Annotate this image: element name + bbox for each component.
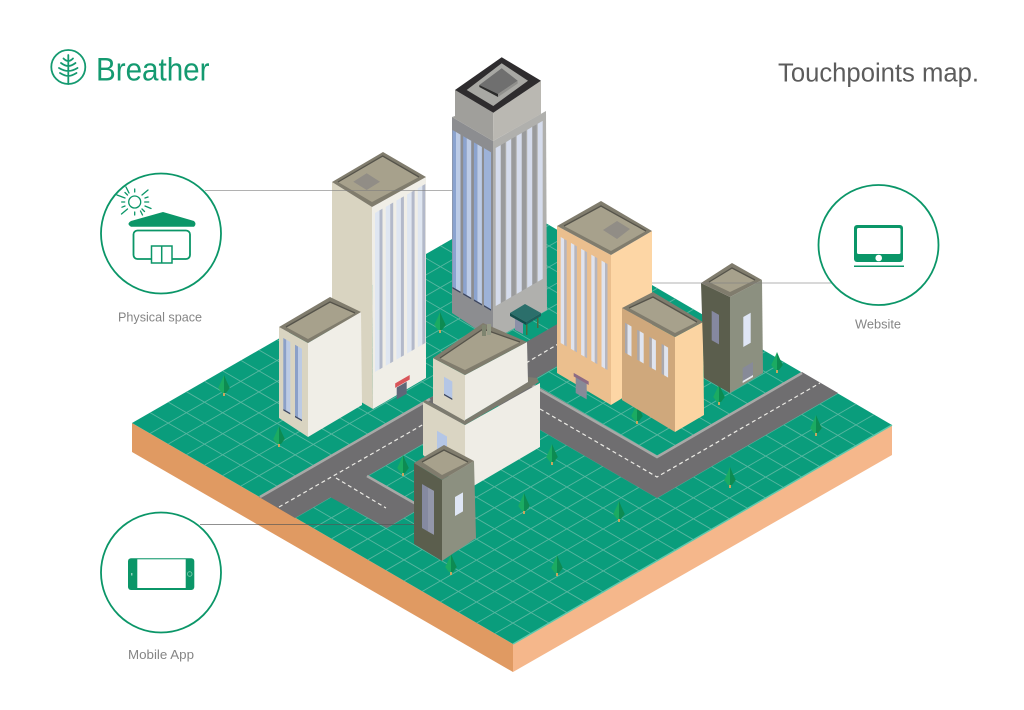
icon: roof and building: [128, 212, 196, 263]
building: stacked cream centre: [423, 323, 540, 491]
isometric city map: [132, 57, 892, 672]
olive right roof: [701, 263, 762, 297]
orange tower door: [574, 373, 589, 401]
road: main north-east: [259, 319, 602, 518]
cream tower roof: [332, 152, 426, 207]
building: olive right: [701, 263, 763, 393]
mobile app label: Mobile App: [128, 648, 194, 662]
building: cream small left: [279, 297, 362, 437]
panel: mobile app: [101, 512, 221, 662]
lower volume: [423, 383, 540, 491]
road curbs: [260, 373, 802, 504]
building: olive front: [414, 445, 476, 561]
title: Touchpoints map.: [778, 60, 979, 88]
leader line: physical space: [205, 190, 452, 192]
ledge: [423, 377, 539, 425]
building: tall cream: [332, 152, 426, 409]
tower cap: [452, 57, 541, 141]
logo: Breather: [51, 50, 210, 88]
cream tower door: [395, 375, 410, 400]
icon: tree in circle: [51, 50, 85, 84]
road centre dashes: [279, 337, 820, 508]
cream small roof: [279, 297, 361, 343]
icon: phone: [128, 558, 194, 590]
road: branch: [330, 476, 422, 528]
leader line: mobile app: [200, 524, 414, 526]
orange short roof: [622, 292, 703, 337]
platform green top: [132, 204, 892, 644]
cream tower windows: [375, 184, 425, 372]
roads: [259, 319, 838, 528]
physical space circle: [101, 174, 221, 294]
mobile app circle: [101, 512, 221, 632]
icon: computer: [854, 225, 904, 267]
physical space label: Physical space: [118, 310, 202, 324]
olive right windows: [712, 311, 719, 344]
cream small windows: [283, 338, 302, 421]
olive front roof: [414, 445, 474, 480]
upper volume: [433, 323, 528, 421]
platform base sides: [132, 423, 892, 672]
tower door and canopy: [510, 304, 541, 335]
panel: website: [818, 185, 938, 332]
website label: Website: [855, 318, 901, 332]
orange short windows: [625, 323, 668, 378]
trees on the ground: [218, 312, 822, 576]
orange tower windows: [561, 237, 608, 370]
panel: physical space: [101, 174, 221, 324]
leader line: website: [652, 282, 831, 284]
building: orange short: [622, 292, 704, 432]
tower right windows: [496, 121, 543, 306]
olive front windows: [422, 484, 434, 535]
olive right door: [743, 362, 753, 383]
platform grid: [150, 214, 892, 644]
icon: sun: [117, 187, 151, 215]
website circle: [818, 185, 938, 305]
building: blue glass tower: [452, 57, 547, 340]
building: orange tall: [557, 201, 652, 405]
road: south-east with corner: [494, 372, 838, 498]
orange tower roof: [557, 201, 652, 255]
logo wordmark: Breather: [96, 52, 210, 88]
tower left windows: [452, 130, 491, 311]
